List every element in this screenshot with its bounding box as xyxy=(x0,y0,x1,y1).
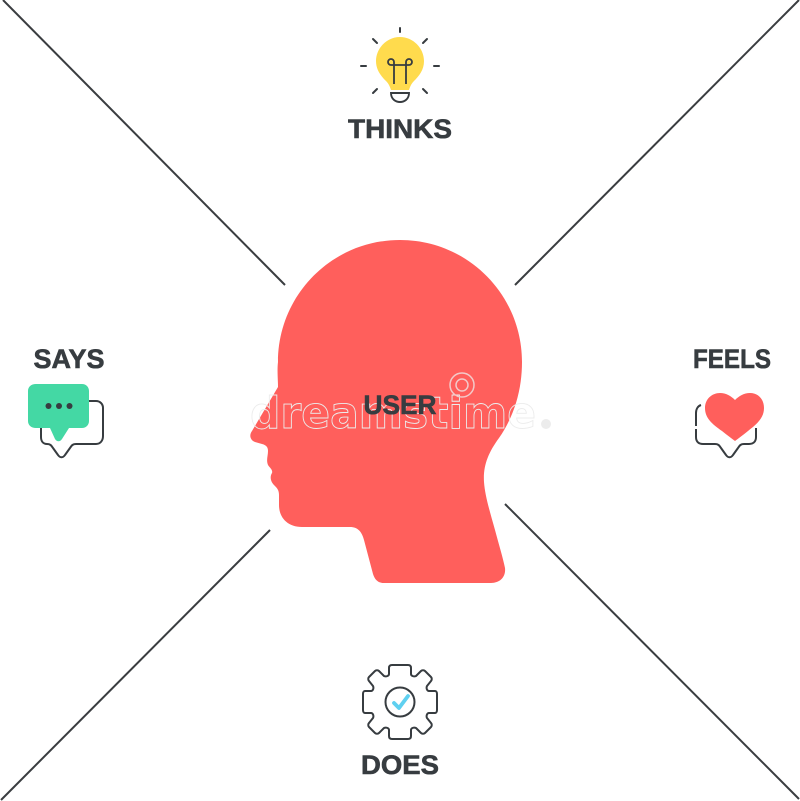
diagonal line: top left xyxy=(3,0,285,285)
icon: heart bubble xyxy=(696,393,764,457)
diagonal line: top right xyxy=(515,0,799,285)
heading: DOES: DOES xyxy=(361,750,439,780)
center label: USER: USER xyxy=(364,390,436,420)
icon: light bulb xyxy=(361,28,439,102)
diagonal line: bottom left xyxy=(1,530,270,800)
head silhouette xyxy=(250,240,522,583)
icon: gear with check xyxy=(363,665,437,739)
icon: speech bubbles xyxy=(28,384,103,457)
heading: THINKS: THINKS xyxy=(348,114,452,144)
heading: FEELS: FEELS xyxy=(693,344,771,374)
diagonal line: bottom right xyxy=(505,504,799,799)
heading: SAYS: SAYS xyxy=(34,344,104,374)
watermark: dreamstime xyxy=(250,388,536,439)
